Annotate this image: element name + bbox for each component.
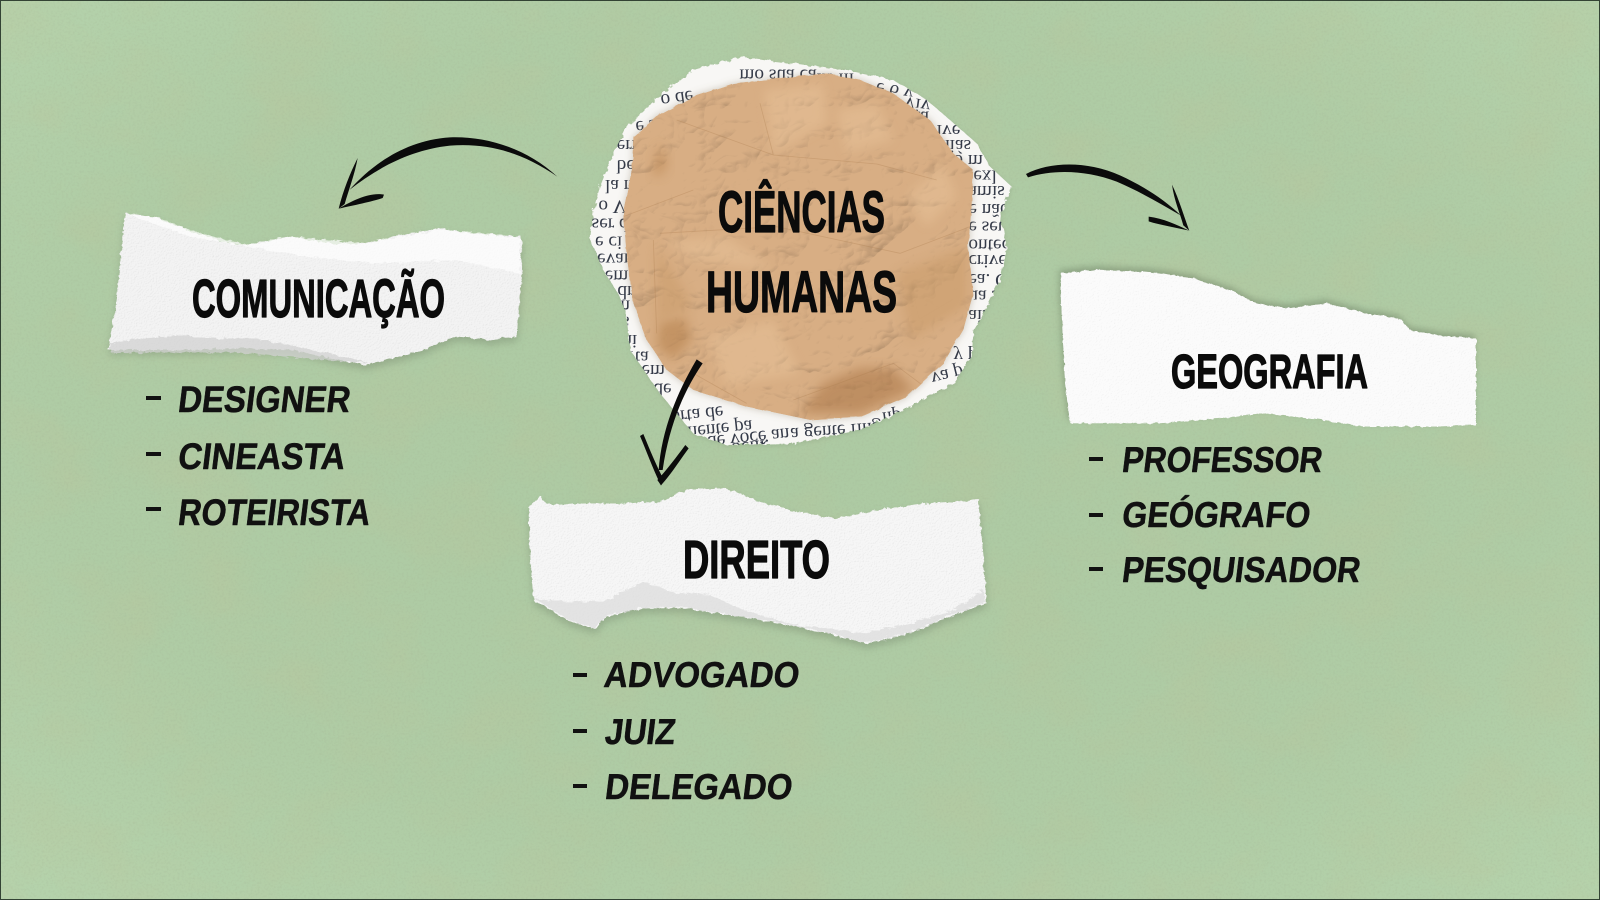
panel: newspaper circle: va p: [929, 361, 966, 389]
heading: Direito: DIREITO: [683, 530, 830, 590]
panel: Comunicação torn paper: [108, 213, 522, 365]
heading: Comunicação: COMUNICAÇÃO: [192, 269, 445, 329]
panel: newspaper circle: e ci: [595, 232, 622, 253]
panel: newspaper circle: rta: [628, 347, 649, 368]
text block: Comunicação careers: CINEASTA: [176, 435, 348, 477]
panel: newspaper circle: e seu: [968, 217, 1008, 238]
panel: newspaper circle: s dr: [605, 281, 634, 302]
panel: newspaper circle: a gente finge: [790, 416, 891, 444]
panel: newspaper circle: [590, 57, 1018, 461]
panel: newspaper circle: ontec: [968, 234, 1010, 255]
panel: newspaper circle: la m: [605, 175, 639, 196]
panel: newspaper circle: de: [653, 378, 672, 399]
panel: newspaper circle: ser de: [592, 213, 637, 234]
text block: Direito careers: ADVOGADO: [602, 654, 802, 695]
panel: newspaper circle: m: [615, 296, 630, 317]
text block: Comunicação careers: [146, 378, 373, 533]
panel: newspaper circle: niás: [940, 135, 971, 156]
panel: newspaper circle: e 6 y: [874, 78, 915, 104]
panel: newspaper circle: o m: [953, 150, 983, 171]
heading: Ciências Humanas: [706, 180, 897, 325]
heading: Ciências Humanas: CIÊNCIAS: [718, 180, 885, 245]
text block: Geografia careers: PESQUISADOR: [1120, 549, 1363, 590]
panel: newspaper circle: amis: [968, 181, 1005, 202]
panel: Direito torn paper: [528, 488, 986, 644]
text block: Geografia careers: GEÓGRAFO: [1120, 493, 1313, 535]
arrow: centre to Direito: [640, 359, 703, 485]
panel: newspaper circle: crive: [968, 250, 1007, 271]
panel: newspaper circle: ive: [937, 120, 960, 141]
panel: newspaper circle: exl: [973, 166, 997, 187]
panel: newspaper circle: o bem:: [716, 434, 771, 461]
panel: newspaper circle: mo sua ca: [739, 64, 817, 85]
text block: Comunicação careers: ROTEIRISTA: [176, 491, 373, 533]
panel: newspaper circle: npece: se: [881, 398, 955, 429]
panel: crumpled kraft circle: [623, 73, 973, 420]
panel: newspaper circle: amente pa: [673, 415, 754, 444]
panel: newspaper circle: rem: [635, 360, 665, 381]
panel: newspaper circle: e não: [968, 199, 1010, 220]
panel: newspaper circle: ua s: [968, 286, 999, 307]
panel: Geografia torn paper: [1061, 270, 1476, 427]
panel: newspaper circle: ea. Co: [968, 269, 1018, 290]
panel: newspaper circle: erna: [617, 135, 650, 156]
panel: newspaper circle: de você an: [706, 423, 791, 453]
panel: newspaper circle: y p q: [953, 345, 992, 366]
panel: newspaper circle: Viy: [901, 92, 932, 116]
arrow: centre to Comunicação: [339, 137, 557, 209]
panel: newspaper circle: be: [617, 155, 635, 176]
arrow: centre to Geografia: [1026, 165, 1189, 231]
panel: newspaper circle: levar: [592, 248, 631, 269]
heading: Ciências Humanas: HUMANAS: [706, 260, 897, 325]
text block: Geografia careers: [1089, 439, 1363, 590]
panel: newspaper circle: ta: [915, 107, 929, 128]
panel: newspaper circle: ai: [623, 330, 637, 351]
heading: Geografia: GEOGRAFIA: [1171, 346, 1368, 399]
panel: newspaper circle: o de: [659, 85, 695, 111]
panel: newspaper circle: ain: [968, 305, 992, 326]
panel: newspaper circle: orta de: [669, 401, 725, 428]
panel: newspaper circle: o Vi: [598, 196, 631, 217]
text block: Geografia careers: PROFESSOR: [1120, 439, 1325, 480]
panel: newspaper circle: ns m: [817, 68, 854, 89]
text block: Direito careers: DELEGADO: [603, 766, 795, 807]
text block: Direito careers: JUIZ: [603, 711, 678, 752]
text block: Comunicação careers: DESIGNER: [176, 378, 353, 420]
panel: newspaper circle: pem: [595, 266, 628, 287]
panel: newspaper circle: is: [617, 312, 630, 333]
text block: Direito careers: [573, 654, 802, 807]
panel: newspaper circle: e ser h: [634, 111, 687, 138]
